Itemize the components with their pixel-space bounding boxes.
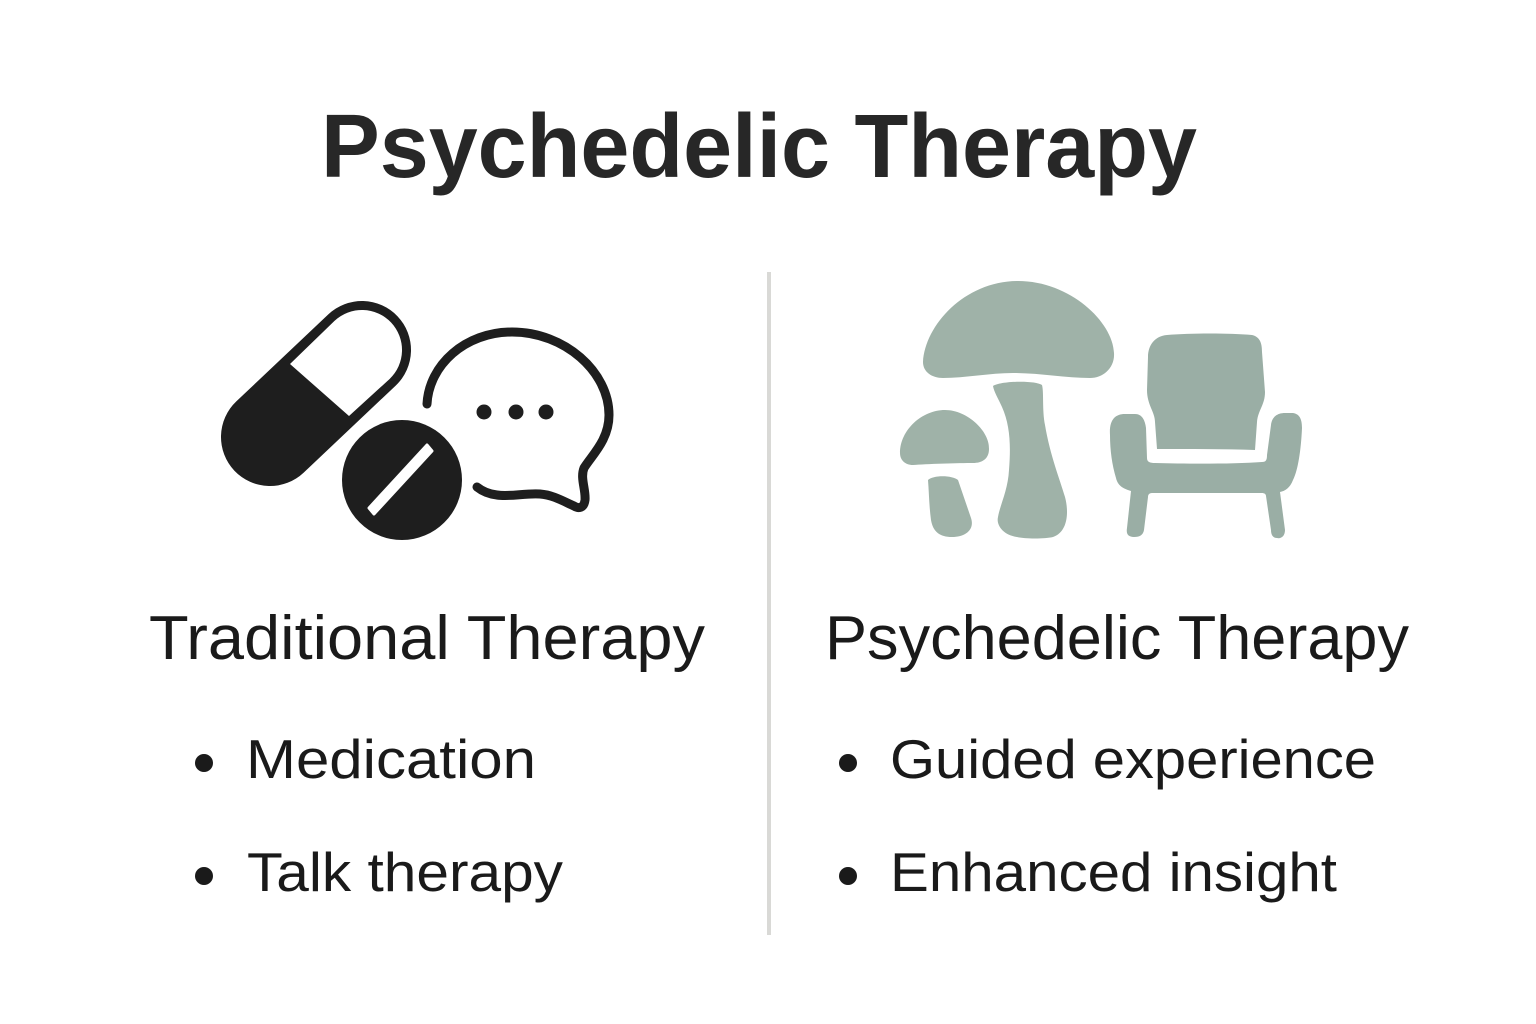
bullet: medication: Medication — [246, 728, 536, 790]
title: Psychedelic Therapy — [321, 97, 1197, 197]
bullet: talk therapy: Talk therapy — [247, 841, 564, 903]
armchair — [1110, 334, 1302, 538]
tablet — [342, 420, 462, 540]
right heading: Psychedelic Therapy — [825, 604, 1409, 673]
large mushroom — [923, 281, 1114, 538]
small mushroom — [900, 410, 989, 537]
icon: pill, tablet and speech bubble — [221, 301, 609, 540]
speech bubble — [427, 332, 609, 508]
bullet: enhanced insight: Enhanced insight — [890, 841, 1337, 903]
bullet: guided experience: Guided experience — [890, 728, 1376, 790]
center divider — [767, 272, 771, 935]
right list — [839, 728, 1376, 903]
left list — [195, 728, 564, 903]
capsule — [221, 301, 411, 486]
left heading: Traditional Therapy — [149, 604, 705, 673]
icon: mushrooms and armchair — [900, 281, 1302, 538]
